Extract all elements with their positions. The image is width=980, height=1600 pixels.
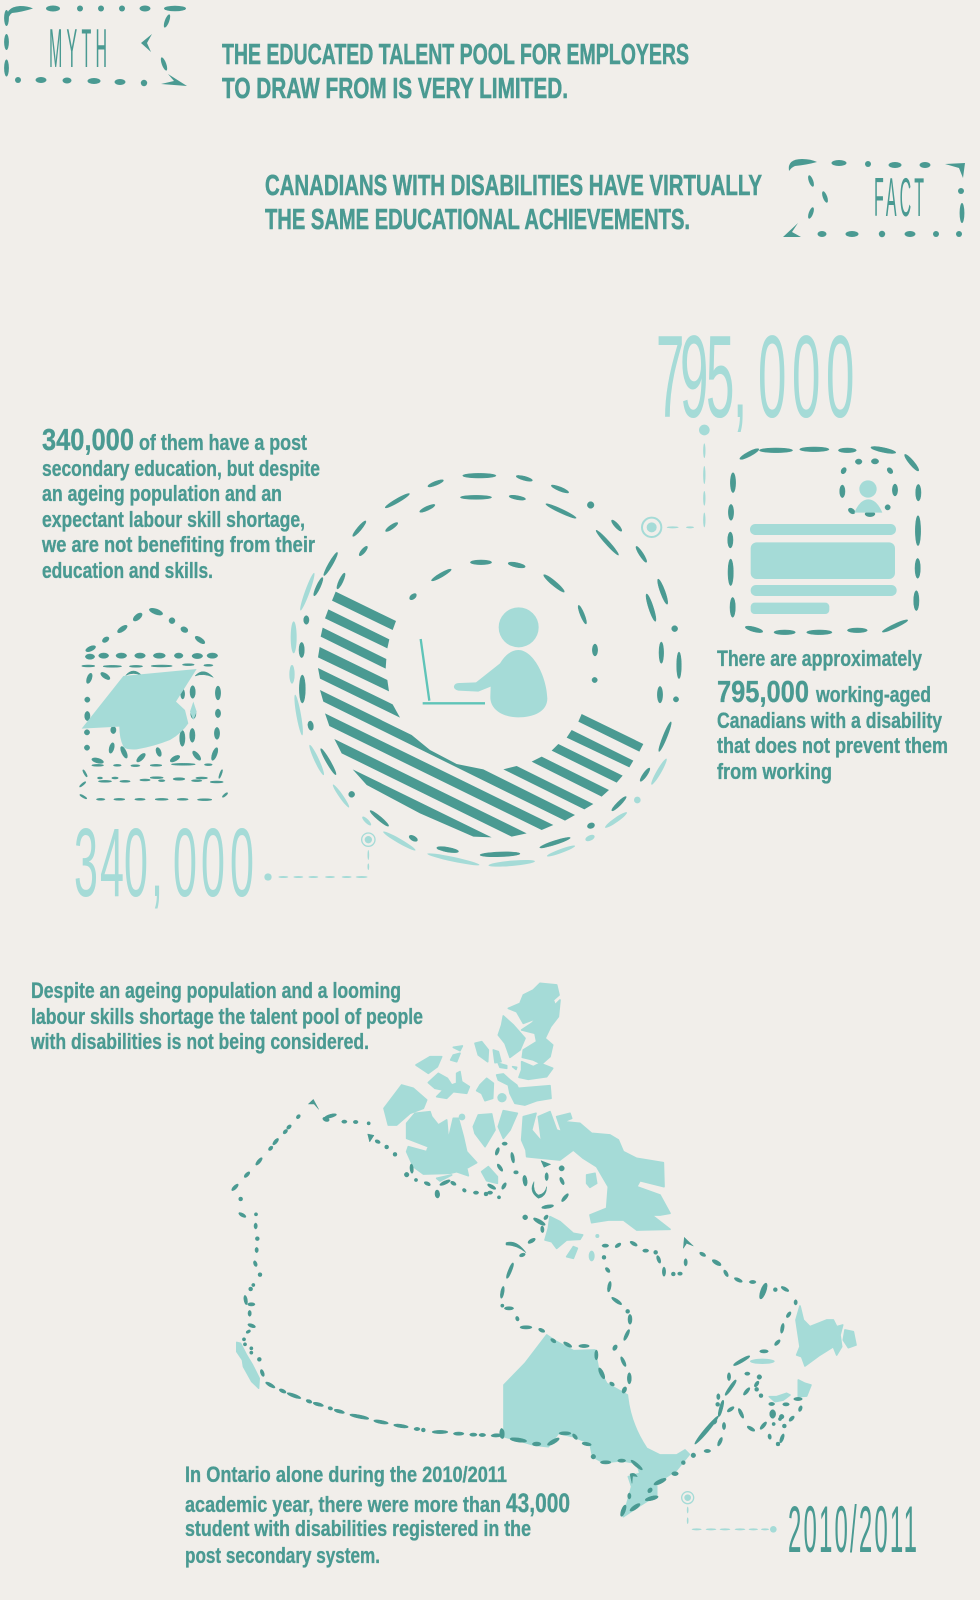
myth badge [4, 6, 187, 86]
text block: talent pool: with disabilities is not being considered. [30, 1029, 369, 1054]
text block: 340,000: expectant labour skill shortage, [42, 507, 305, 532]
connector target [642, 425, 710, 537]
fact heading: CANADIANS WITH DISABILITIES HAVE VIRTUALLY [265, 170, 762, 202]
text block: Ontario: academic year, there were more than [185, 1492, 501, 1517]
text block: 795,000: working-aged [815, 682, 931, 707]
striped crescent [318, 592, 643, 837]
fact badge [783, 159, 965, 237]
dashed ring light [289, 572, 669, 868]
text block: Ontario: 43,000 [506, 1488, 570, 1518]
card dashed border [728, 445, 921, 635]
text block: Ontario: student with disabilities registered in the [185, 1516, 531, 1541]
Ontario and eastern islands [504, 1306, 856, 1517]
fact heading: THE SAME EDUCATIONAL ACHIEVEMENTS. [265, 204, 690, 236]
text block: 340,000: we are not benefiting from their [41, 532, 315, 557]
icon: résumé card with connector [642, 425, 921, 635]
myth heading: TO DRAW FROM IS VERY LIMITED. [222, 73, 568, 105]
text block: 795,000: 795,000 [717, 674, 809, 709]
big number 340,000: 340,000 [74, 808, 254, 917]
text block: talent pool: labour skills shortage the talent pool of people [31, 1004, 423, 1029]
text block: 340,000: secondary education, but despite [42, 456, 320, 481]
big number 795,000: 795,000 [656, 312, 854, 443]
fact heading [265, 170, 762, 236]
text block: 340,000: 340,000 [42, 422, 134, 457]
card contents [750, 480, 897, 614]
big number 2010/2011: 2010/2011 [788, 1494, 917, 1567]
northern islands [384, 983, 670, 1261]
text block: 340,000 [41, 422, 320, 583]
dashed border north [522, 1161, 569, 1244]
text block: 340,000: education and skills. [42, 558, 213, 583]
text block: 340,000: an ageing population and an [42, 481, 282, 506]
Vancouver Island [237, 1342, 259, 1388]
text block: talent pool: Despite an ageing population and a looming [31, 978, 401, 1003]
text block: Ontario [185, 1462, 570, 1568]
text block: 795,000: There are approximately [717, 646, 923, 671]
dashed ring dark [299, 473, 681, 857]
icon: graduation cap with connector [79, 607, 375, 881]
map of Canada [231, 983, 856, 1517]
text block: talent pool [30, 978, 423, 1054]
text block: Ontario: post secondary system. [185, 1543, 380, 1568]
text block: 795,000: from working [717, 759, 832, 784]
text block: 340,000: of them have a post [139, 430, 308, 455]
icon: person at laptop [421, 607, 547, 717]
text block: Ontario: In Ontario alone during the 2010/2011 [185, 1462, 507, 1487]
myth heading: THE EDUCATED TALENT POOL FOR EMPLOYERS [222, 39, 689, 71]
dashed border east [491, 1237, 803, 1517]
fact label: FACT [874, 169, 924, 228]
connector: 2010/2011 [682, 1492, 777, 1533]
text block: 795,000 [717, 646, 948, 784]
dashed border west [231, 1099, 528, 1439]
myth label: MYTH [49, 20, 107, 79]
myth heading [222, 39, 689, 105]
central circle illustration [289, 473, 681, 868]
